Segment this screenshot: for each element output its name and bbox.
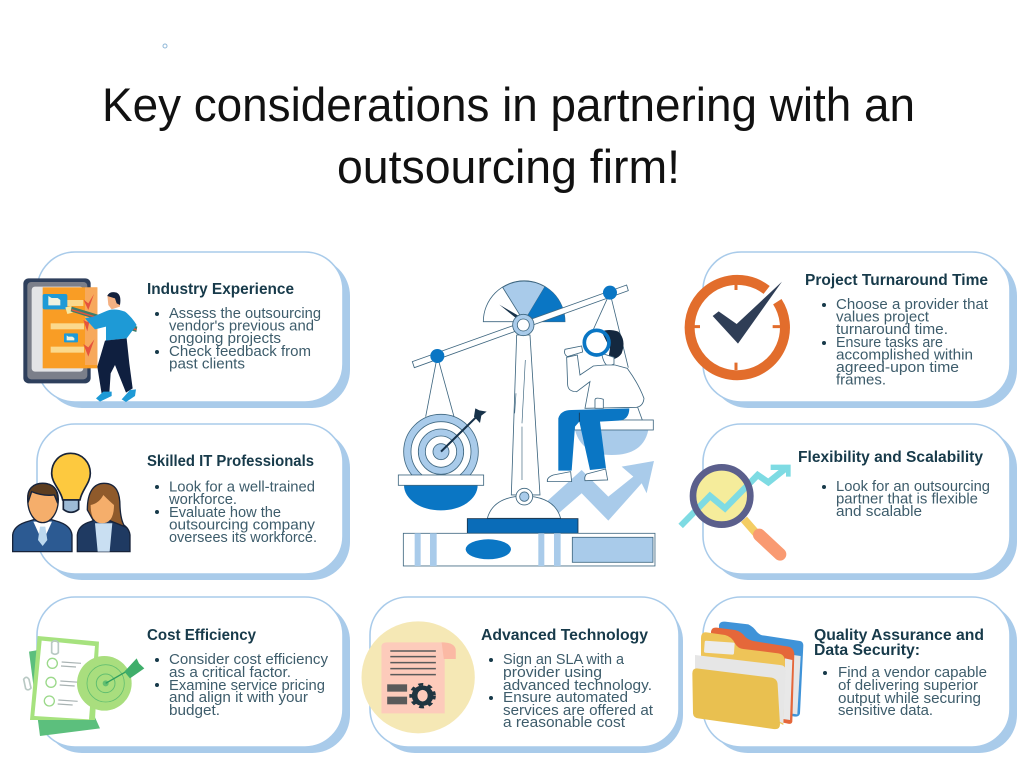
title	[102, 78, 915, 193]
bullet text: industry experience: Check feedback from	[169, 343, 311, 360]
bullet text: advanced technology: advanced technology.	[503, 677, 652, 694]
bullet text: quality assurance and data security	[823, 664, 987, 719]
bullet text: skilled IT professionals: Look for a well-trained	[169, 478, 315, 496]
bullet text: project turnaround time: Choose a provider that	[836, 296, 989, 313]
heading: industry experience: Industry Experience	[147, 281, 294, 298]
bullet text: skilled IT professionals: outsourcing company	[169, 516, 315, 534]
bullet text: project turnaround time: frames.	[836, 372, 886, 388]
bullet text: project turnaround time: agreed-upon time	[836, 359, 959, 376]
bullet text: advanced technology: services are offered at	[503, 702, 654, 719]
icon: man reviewing checklist on tablet	[23, 278, 137, 402]
heading: project turnaround time: Project Turnaround Time	[805, 272, 988, 289]
bullet text: project turnaround time: accomplished within	[836, 346, 973, 364]
title: outsourcing firm!	[337, 140, 680, 193]
bullet text: cost efficiency: as a critical factor.	[169, 664, 291, 681]
bullet text: cost efficiency: budget.	[169, 702, 220, 719]
icon: checklist and target	[24, 636, 144, 736]
bullet text: industry experience: Assess the outsourcing	[169, 305, 321, 322]
bullet text: flexibility and scalability: and scalable	[836, 503, 922, 520]
heading: flexibility and scalability: Flexibility and Scalability	[798, 449, 983, 466]
bullet text: project turnaround time: turnaround time.	[836, 321, 948, 338]
beam	[412, 285, 628, 368]
bullet text: flexibility and scalability: Look for an outsourcing	[836, 478, 990, 495]
gauge	[483, 281, 565, 322]
icon: stack of folders	[692, 622, 803, 729]
heading: quality assurance and data security	[814, 627, 984, 659]
title: Key considerations in partnering with an	[102, 78, 915, 131]
heading: quality assurance and data security: Quality Assurance and	[814, 627, 984, 644]
icon: magnifier over growth arrow	[681, 465, 791, 554]
bullet text: project turnaround time: Ensure tasks are	[836, 334, 943, 351]
panel: cost efficiency	[24, 597, 350, 753]
bullet text: advanced technology: Sign an SLA with a	[503, 651, 625, 668]
growth arrow	[547, 461, 654, 521]
bullet text: skilled IT professionals: workforce.	[168, 491, 237, 508]
bullet text: project turnaround time	[822, 296, 989, 388]
panel: advanced technology	[362, 597, 683, 753]
heading: quality assurance and data security: Data Security:	[814, 642, 920, 659]
heading: advanced technology: Advanced Technology	[481, 627, 648, 644]
bullet text: advanced technology: Ensure automated	[503, 689, 628, 706]
left pan with target	[398, 349, 487, 510]
bullet text: advanced technology	[489, 651, 654, 731]
panel: project turnaround time	[690, 252, 1017, 408]
icon: clock with check mark	[690, 280, 785, 375]
heading: skilled IT professionals: Skilled IT Professionals	[147, 453, 314, 470]
column and base	[467, 335, 578, 533]
bullet text: skilled IT professionals	[155, 478, 317, 546]
right pan with person	[547, 286, 653, 482]
bullet text: quality assurance and data security: output while securing	[838, 690, 981, 707]
bullet text: industry experience: ongoing projects	[169, 330, 281, 347]
bullet text: skilled IT professionals: Evaluate how the	[169, 504, 281, 521]
bullet text: flexibility and scalability: partner that is flexible	[836, 490, 978, 508]
panel: quality assurance and data security	[692, 597, 1017, 753]
central illustration: balance scale with person and target	[398, 281, 655, 566]
panel: industry experience	[23, 252, 350, 408]
bullet text: quality assurance and data security: Find a vendor capable	[838, 664, 987, 681]
bullet text: quality assurance and data security: sensitive data.	[838, 702, 933, 719]
books	[403, 533, 655, 566]
bullet text: advanced technology: provider using	[503, 664, 602, 681]
bullet text: industry experience	[155, 305, 321, 372]
heading: cost efficiency: Cost Efficiency	[147, 627, 256, 644]
panel: flexibility and scalability	[681, 424, 1017, 580]
bullet text: flexibility and scalability	[822, 478, 990, 520]
bullet text: industry experience: past clients	[169, 356, 245, 372]
bullet text: cost efficiency: and align it with your	[169, 689, 308, 706]
bullet text: cost efficiency: Consider cost efficiency	[169, 651, 328, 668]
bullet text: cost efficiency: Examine service pricing	[169, 677, 325, 694]
bullet text: industry experience: vendor's previous and	[169, 318, 314, 334]
panel: skilled IT professionals	[13, 424, 350, 580]
bullet text: skilled IT professionals: oversees its workforce.	[169, 529, 317, 546]
bullet text: quality assurance and data security: of delivering superior	[838, 677, 978, 694]
icon: service agreement document with gear	[362, 621, 475, 733]
pivot	[513, 314, 534, 336]
bullet text: advanced technology: a reasonable cost	[503, 714, 626, 731]
icon: two professionals and light bulb	[13, 453, 130, 552]
small decorative dot	[163, 44, 167, 48]
bullet text: cost efficiency	[155, 651, 328, 719]
bullet text: project turnaround time: values project	[836, 308, 930, 326]
